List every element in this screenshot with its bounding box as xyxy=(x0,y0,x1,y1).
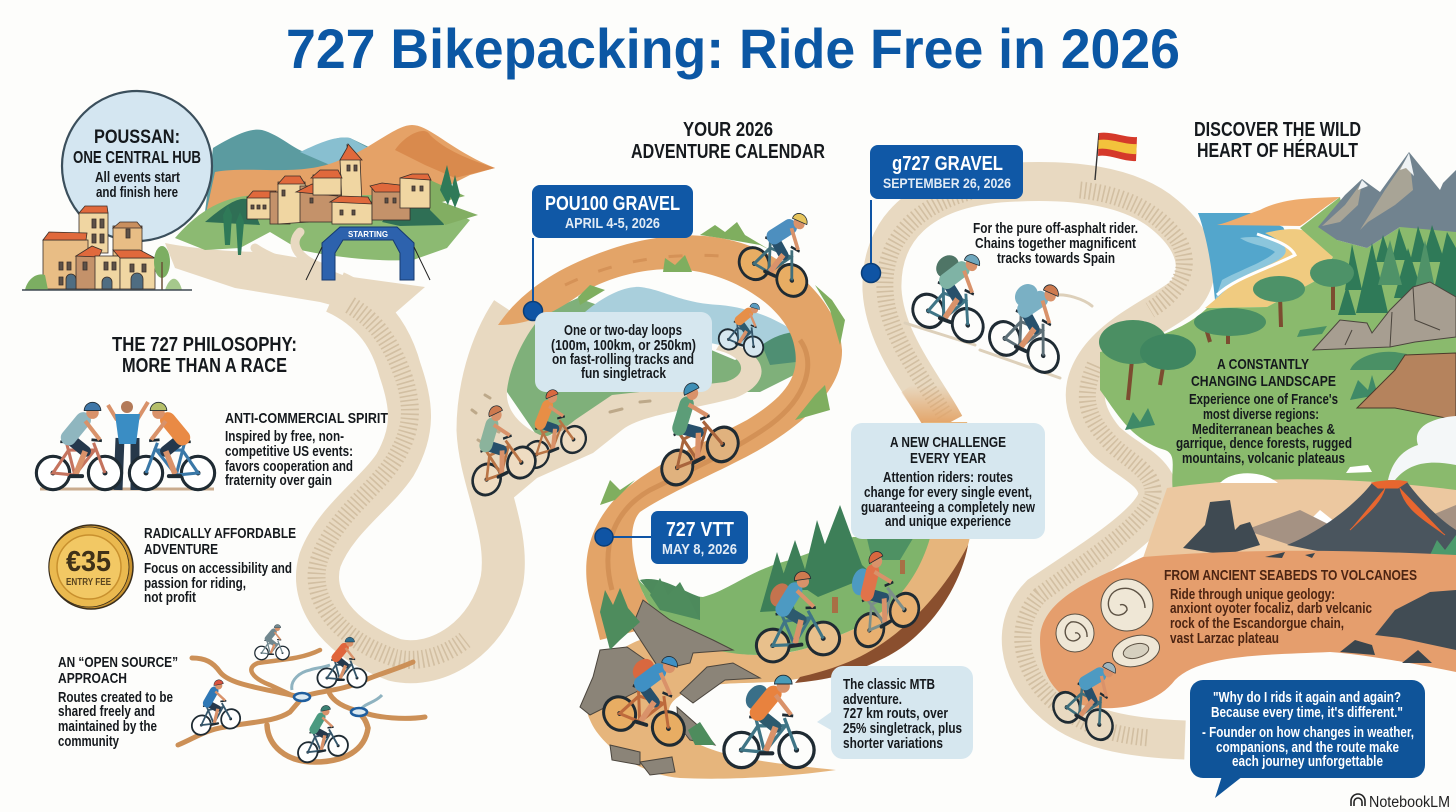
riders on the g727 section xyxy=(910,239,1077,378)
road over hill xyxy=(255,232,345,282)
orange road: upper loop xyxy=(498,222,845,640)
mountains xyxy=(1318,152,1456,248)
tufts xyxy=(1125,375,1378,430)
callout: POU100 gravel: APRIL 4-5, 2026 xyxy=(565,216,660,232)
text: geology: anxiont oyoter focaliz, darb velcanic xyxy=(1170,601,1372,617)
diagram: open source trail network xyxy=(178,624,425,764)
panel: classic MTB: adventure. xyxy=(843,692,902,708)
text: radically affordable: passion for riding, xyxy=(144,576,246,592)
icon: oyster xyxy=(1109,630,1163,672)
scenery: hills behind the first loop xyxy=(507,287,800,440)
rocks xyxy=(580,600,760,775)
callout: 727 VTT: 727 VTT xyxy=(666,518,734,541)
panel: A new challenge: guaranteeing a completely new xyxy=(861,500,1036,516)
panel: POU100 description xyxy=(535,312,712,392)
panel: POU100 description: on fast-rolling tracks and xyxy=(552,352,694,368)
text: geology: vast Larzac plateau xyxy=(1170,631,1279,647)
panel: A new challenge: EVERY YEAR xyxy=(910,450,986,467)
heading: philosophy: THE 727 PHILOSOPHY: xyxy=(112,334,297,356)
grass tufts on the road edge xyxy=(578,222,845,505)
callout: founder quote: each journey unforgettable xyxy=(1232,754,1383,770)
text: open source: shared freely and xyxy=(58,704,155,720)
heading: Hérault: HEART OF HÉRAULT xyxy=(1197,139,1358,162)
conifers xyxy=(1338,225,1456,315)
heading: Hérault: DISCOVER THE WILD xyxy=(1194,119,1361,141)
panel: A new challenge: A NEW CHALLENGE xyxy=(890,434,1006,451)
icon: ammonite large xyxy=(1101,579,1153,631)
icon: entry fee coin: €35 xyxy=(66,546,111,578)
volcano xyxy=(1287,482,1456,558)
text: radically affordable: ADVENTURE xyxy=(144,541,218,558)
stump xyxy=(1357,353,1456,420)
heading: philosophy: MORE THAN A RACE xyxy=(122,355,287,377)
text: geology xyxy=(1164,567,1417,647)
callout: founder quote: "Why do I rids it again and again? xyxy=(1213,690,1401,706)
heading: Hérault xyxy=(1194,119,1361,162)
text: anti-commercial spirit xyxy=(225,410,388,489)
text: changing landscape: most diverse regions: xyxy=(1203,407,1319,423)
volcanic ground xyxy=(1143,479,1456,560)
callout: g727 gravel: SEPTEMBER 26, 2026 xyxy=(883,175,1011,191)
text: changing landscape: garrique, dence forests, rugged xyxy=(1176,436,1352,452)
text: open source xyxy=(58,654,178,750)
panel: classic MTB: 727 km routs, over xyxy=(843,706,948,722)
panel: Poussan hub xyxy=(62,91,212,241)
icon: entry fee coin xyxy=(49,525,133,609)
panel: Poussan hub: All events start xyxy=(95,170,180,186)
ground shadows under the g727 riders xyxy=(905,295,1092,378)
panel: classic MTB xyxy=(817,666,973,759)
icon: town buildings xyxy=(22,206,192,290)
text: anti-commercial spirit: ANTI-COMMERCIAL SPIRIT xyxy=(225,410,388,427)
callout: g727 gravel xyxy=(862,145,1023,282)
text: g727 description: tracks towards Spain xyxy=(997,251,1115,267)
icon: starting arch xyxy=(306,227,430,280)
heading: calendar: YOUR 2026 xyxy=(683,119,773,141)
text: g727 description: For the pure off-asphalt rider. xyxy=(973,221,1138,237)
text: changing landscape: mountains, volcanic plateaus xyxy=(1182,451,1345,467)
rock face xyxy=(1313,282,1456,350)
icon: ammonite small xyxy=(1056,614,1094,652)
landscape: Hérault xyxy=(1099,152,1456,560)
text: radically affordable: RADICALLY AFFORDABLE xyxy=(144,525,296,542)
text: changing landscape: Mediterranean beaches & xyxy=(1192,422,1335,438)
panel: classic MTB: shorter variations xyxy=(843,736,943,752)
text: open source: AN “OPEN SOURCE” xyxy=(58,654,178,671)
text: geology: Ride through unique geology: xyxy=(1170,587,1335,603)
text: geology: rock of the Escandorgue chain, xyxy=(1170,616,1344,632)
icon: starting arch: STARTING xyxy=(348,229,388,239)
text: radically affordable: not profit xyxy=(144,590,196,606)
panel: Poussan hub: POUSSAN: xyxy=(94,127,180,148)
icon: Spanish flag xyxy=(1095,133,1137,180)
callout: founder quote: Because every time, it's different." xyxy=(1211,705,1403,721)
heading: calendar: ADVENTURE CALENDAR xyxy=(631,141,825,163)
town and Poussan hub xyxy=(175,125,495,260)
panel: A new challenge: change for every single event, xyxy=(864,485,1032,501)
callout: POU100 gravel: POU100 GRAVEL xyxy=(545,192,680,215)
panel: POU100 description: (100m, 100km, or 250km) xyxy=(551,338,696,354)
icon: entry fee coin: ENTRY FEE xyxy=(66,577,111,588)
text: anti-commercial spirit: Inspired by free, non- xyxy=(225,429,344,445)
icon: rider on the final stretch xyxy=(1050,643,1131,745)
text: anti-commercial spirit: favors cooperation and xyxy=(225,459,353,475)
text: open source: community xyxy=(58,734,119,750)
beige route: start to first climb xyxy=(165,243,512,662)
beige route: g727 and Hérault section xyxy=(882,182,1195,740)
umbrella pines xyxy=(1128,280,1333,400)
text: radically affordable xyxy=(144,525,296,606)
bushes xyxy=(1297,326,1407,370)
text: changing landscape: Experience one of France's xyxy=(1189,392,1338,408)
panel: classic MTB: 25% singletrack, plus xyxy=(843,721,962,737)
heading: philosophy xyxy=(112,334,297,377)
text: changing landscape: A CONSTANTLY xyxy=(1217,356,1309,373)
sea xyxy=(1198,213,1297,300)
heading: calendar xyxy=(631,119,825,163)
NotebookLM mark: NotebookLM xyxy=(1369,794,1450,811)
text: changing landscape xyxy=(1176,356,1352,467)
panel: A new challenge: and unique experience xyxy=(885,514,1011,530)
village xyxy=(247,144,431,224)
riders on the MTB section xyxy=(601,540,923,768)
callout: founder quote xyxy=(1190,680,1425,798)
sand road: lower section xyxy=(586,422,976,779)
text: changing landscape: CHANGING LANDSCAPE xyxy=(1191,373,1336,390)
orange geology ground xyxy=(1040,551,1456,708)
title: 727 Bikepacking: Ride Free in 2026 xyxy=(286,17,1180,80)
basalt rock xyxy=(1183,500,1260,555)
callout: 727 VTT xyxy=(595,511,748,564)
smoke xyxy=(1388,416,1456,480)
text: open source: Routes created to be xyxy=(58,690,173,706)
text: radically affordable: Focus on accessibility and xyxy=(144,561,292,577)
sand hill xyxy=(1217,197,1340,226)
hills xyxy=(205,130,380,212)
panel: POU100 description: One or two-day loops xyxy=(564,323,682,339)
beige trail through the first loop xyxy=(458,318,762,515)
text: anti-commercial spirit: competitive US events: xyxy=(225,444,353,460)
text: g727 description: Chains together magnificent xyxy=(975,236,1136,252)
text: g727 description xyxy=(973,221,1138,267)
callout: g727 gravel: g727 GRAVEL xyxy=(892,152,1003,175)
panel: A new challenge xyxy=(851,423,1045,539)
green land xyxy=(1100,197,1456,498)
callout: founder quote: companions, and the route make xyxy=(1216,740,1399,756)
callout: POU100 gravel xyxy=(524,185,693,320)
callout: 727 VTT: MAY 8, 2026 xyxy=(662,542,737,558)
panel: classic MTB: The classic MTB xyxy=(843,677,935,693)
panel: Poussan hub: and finish here xyxy=(96,185,178,201)
text: open source: APPROACH xyxy=(58,670,127,687)
grass by the rocks xyxy=(600,578,715,745)
forest hollow xyxy=(637,505,930,655)
panel: Poussan hub: ONE CENTRAL HUB xyxy=(73,147,201,167)
panel: A new challenge: Attention riders: routes xyxy=(883,470,1013,486)
icon: cyclists with standing friend xyxy=(36,401,215,490)
text: open source: maintained by the xyxy=(58,719,157,735)
panel: POU100 description: fun singletrack xyxy=(581,366,667,382)
text: anti-commercial spirit: fraternity over gain xyxy=(225,473,332,489)
dark rocks xyxy=(1375,590,1456,650)
beach xyxy=(1205,229,1333,308)
riders on the gravel loop xyxy=(454,195,825,500)
